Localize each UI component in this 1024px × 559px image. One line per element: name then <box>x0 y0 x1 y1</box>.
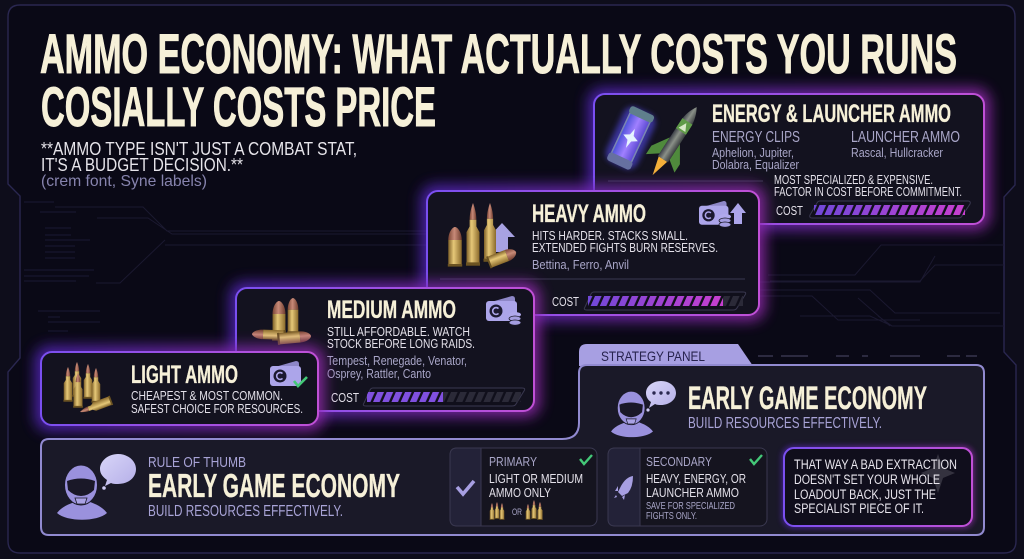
icon: rule of thumb pilot <box>57 454 136 520</box>
strategy tab <box>579 344 753 366</box>
heavy description: HITS HARDER. STACKS SMALL. <box>532 228 688 243</box>
energy cost meter: COST <box>776 204 803 218</box>
energy clips list: Dolabra, Equalizer <box>712 157 800 172</box>
launcher ammo list: Rascal, Hullcracker <box>851 145 944 160</box>
card: secondary: FIGHTS ONLY. <box>646 511 697 522</box>
light description: CHEAPEST & MOST COMMON. <box>131 388 283 403</box>
title: COSIALLY COSTS PRICE <box>41 75 436 138</box>
icon: light bullets <box>63 362 113 417</box>
icon: energy cell <box>602 104 659 172</box>
energy description: FACTOR IN COST BEFORE COMMITMENT. <box>774 185 962 199</box>
panel: strategy <box>41 365 984 535</box>
medium description: STOCK BEFORE LONG RAIDS. <box>327 336 475 351</box>
icon: green check <box>750 455 762 464</box>
callout: THAT WAY A BAD EXTRACTION <box>794 457 957 472</box>
panel: light ammo <box>35 346 324 431</box>
rule of thumb heading: EARLY GAME ECONOMY <box>148 467 400 504</box>
energy clips list <box>712 129 800 172</box>
heavy cost meter <box>552 292 746 310</box>
heavy cost meter: COST <box>552 295 579 309</box>
callout <box>782 446 974 528</box>
icon: lavender check <box>457 481 474 494</box>
panel: heavy ammo <box>421 185 765 321</box>
strategy heading <box>688 380 927 432</box>
card: primary <box>450 448 597 526</box>
launcher ammo list: LAUNCHER AMMO <box>851 129 960 146</box>
strategy heading: BUILD RESOURCES EFFECTIVELY. <box>688 415 882 432</box>
icon: money up <box>699 201 746 227</box>
subtitle: (crem font, Syne labels) <box>41 173 207 190</box>
icon: mini bullets <box>490 500 543 520</box>
circuit traces background <box>24 202 1004 331</box>
subtitle: IT'S A BUDGET DECISION.** <box>41 155 243 175</box>
icon: green check <box>580 455 592 464</box>
subtitle: **AMMO TYPE ISN'T JUST A COMBAT STAT, <box>41 139 357 159</box>
rule of thumb heading <box>148 454 400 520</box>
card: secondary: HEAVY, ENERGY, OR <box>646 471 746 486</box>
card: secondary <box>608 448 767 526</box>
medium description: Osprey, Rattler, Canto <box>327 366 431 381</box>
icon: money coins <box>486 296 521 325</box>
card: primary: PRIMARY <box>489 454 537 469</box>
medium cost meter: COST <box>331 391 359 405</box>
panel: medium ammo <box>230 282 540 417</box>
medium description <box>327 324 475 381</box>
card: primary: LIGHT OR MEDIUM <box>489 471 583 486</box>
energy cost meter <box>776 201 970 218</box>
card: primary: AMMO ONLY <box>489 485 551 500</box>
icon: medium bullets <box>252 298 312 345</box>
icon: small rocket <box>614 476 633 500</box>
callout: DOESN'T SET YOUR WHOLE <box>794 472 940 487</box>
energy clips list: Aphelion, Jupiter, <box>712 145 794 160</box>
heavy description: Bettina, Ferro, Anvil <box>532 257 629 272</box>
card: secondary: SECONDARY <box>646 454 712 469</box>
icon: heavy bullets <box>448 203 518 269</box>
title <box>40 22 957 138</box>
card: secondary: LAUNCHER AMMO <box>646 485 739 500</box>
heavy description <box>532 228 718 272</box>
medium cost meter <box>331 388 525 406</box>
icon: rocket <box>638 98 711 184</box>
card: secondary: SAVE FOR SPECIALIZED <box>646 501 735 512</box>
energy description <box>774 173 962 199</box>
energy description: MOST SPECIALIZED & EXPENSIVE. <box>774 173 933 187</box>
light description <box>131 388 303 416</box>
icon: money with check <box>270 361 307 386</box>
callout: LOADOUT BACK, JUST THE <box>794 487 936 502</box>
rule of thumb heading: RULE OF THUMB <box>148 454 246 471</box>
tab dashes <box>758 355 977 357</box>
callout: SPECIALIST PIECE OF IT. <box>794 501 924 516</box>
panel: energy and launcher ammo <box>588 88 990 230</box>
heavy description: EXTENDED FIGHTS BURN RESERVES. <box>532 240 718 255</box>
icon: pilot with speech bubble <box>611 381 676 437</box>
strategy tab: STRATEGY PANEL <box>601 348 705 364</box>
medium title: MEDIUM AMMO <box>327 296 456 324</box>
heavy title: HEAVY AMMO <box>532 200 646 228</box>
energy clips list: ENERGY CLIPS <box>712 129 800 146</box>
rule of thumb heading: BUILD RESOURCES EFFECTIVELY. <box>148 503 343 520</box>
light title: LIGHT AMMO <box>131 361 238 389</box>
subtitle <box>41 139 357 190</box>
light description: SAFEST CHOICE FOR RESOURCES. <box>131 401 303 416</box>
medium description: Tempest, Renegade, Venator, <box>327 353 467 368</box>
card: primary: OR <box>512 507 522 517</box>
medium description: STILL AFFORDABLE. WATCH <box>327 324 470 339</box>
launcher ammo list <box>851 129 960 160</box>
